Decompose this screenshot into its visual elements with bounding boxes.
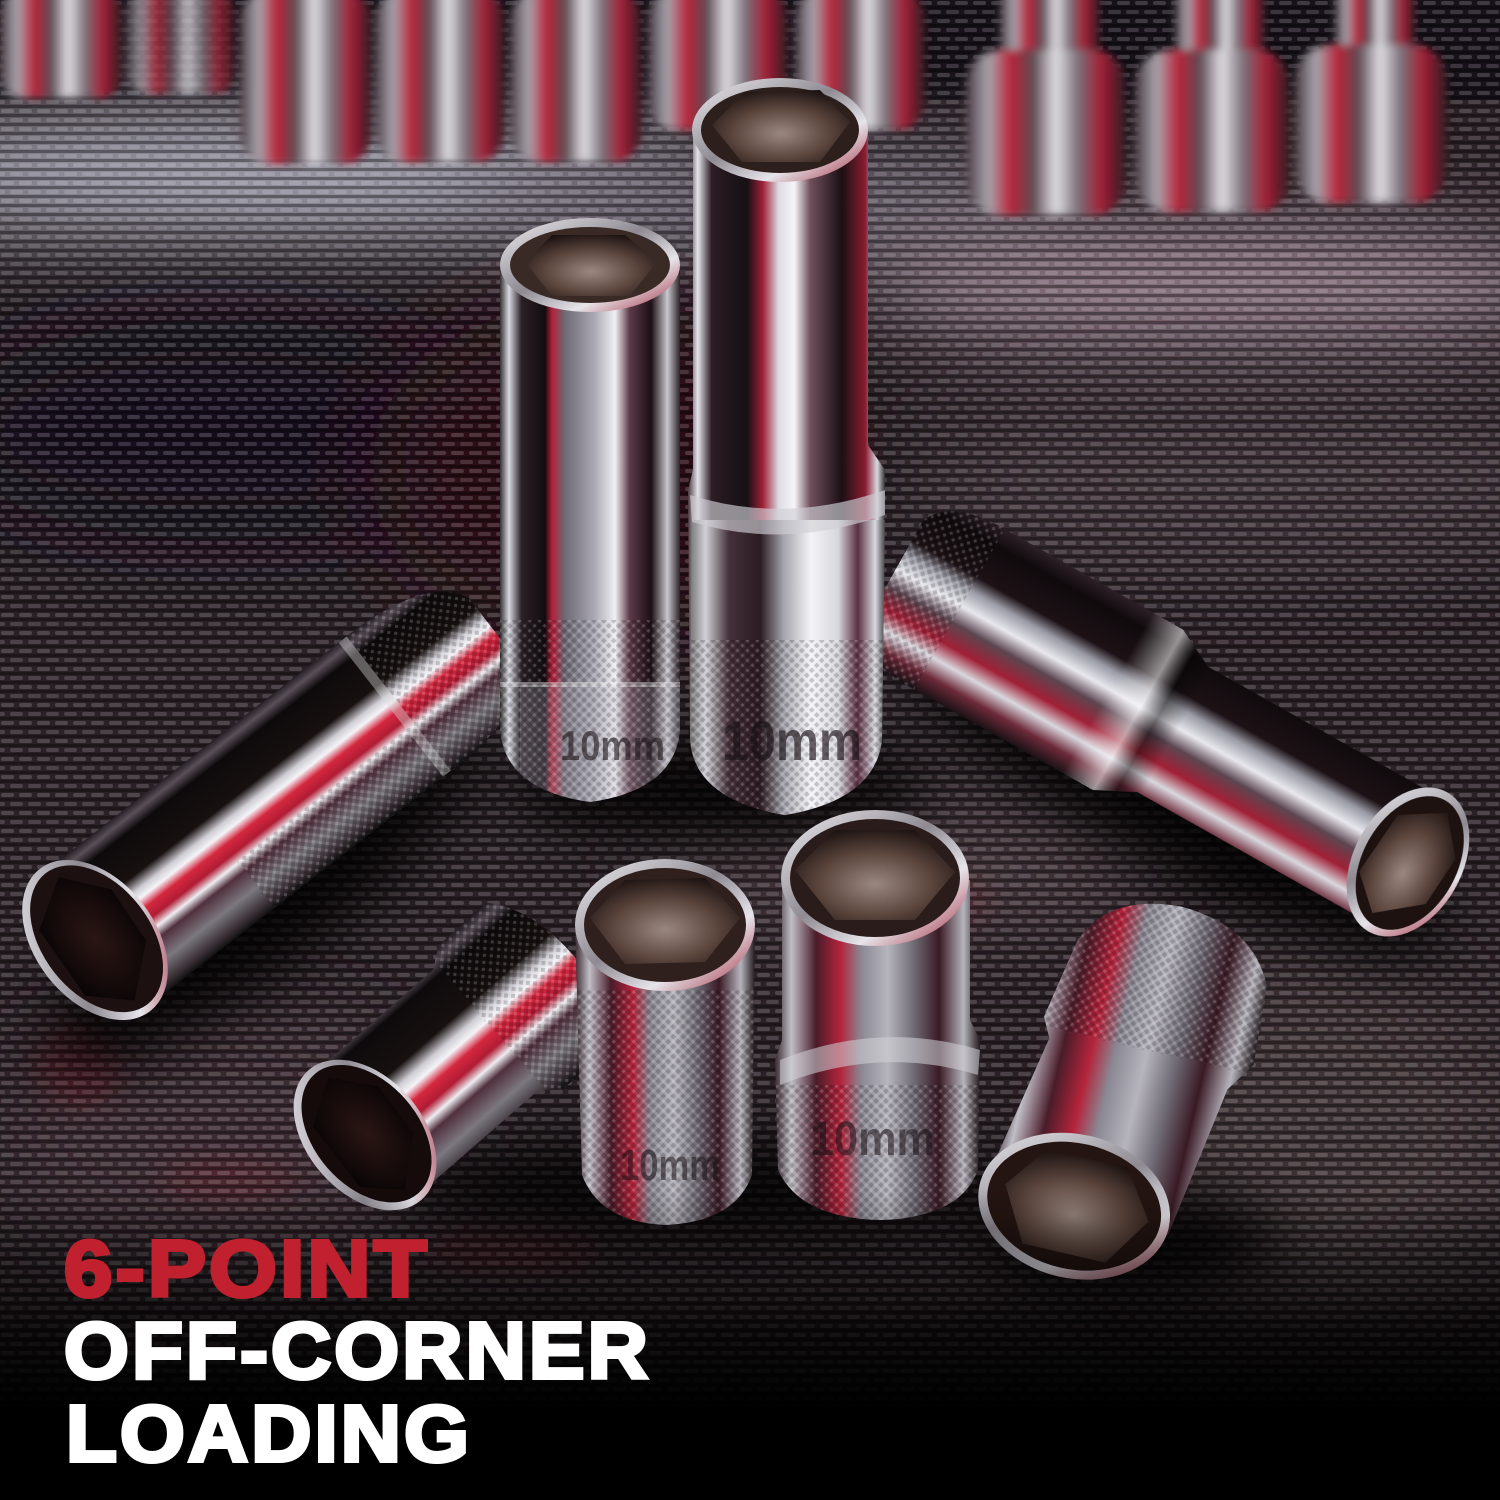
- size marking: 10mm: [810, 1113, 935, 1166]
- bottom fade to black: [0, 1190, 1500, 1500]
- socket: short, standing centre: [575, 859, 755, 1225]
- hex opening: [993, 1141, 1159, 1270]
- hex opening: [795, 830, 955, 920]
- socket: deep, standing left: [500, 218, 680, 805]
- background row of blurred sockets, top left: [0, 0, 925, 164]
- size marking: 10mm: [722, 709, 862, 772]
- heading line: LOADING: LOADING: [66, 1389, 472, 1478]
- socket: deep, standing right: [688, 78, 885, 815]
- background row of blurred sockets, top right: [966, 0, 1447, 215]
- hex opening: [18, 856, 174, 1023]
- hex opening: [590, 878, 740, 964]
- heading line: OFF-CORNER: OFF-CORNER: [64, 1306, 651, 1395]
- hex opening: [292, 1056, 441, 1211]
- socket: short, tipped toward viewer: [978, 904, 1266, 1280]
- socket: short, standing right: [775, 810, 980, 1220]
- size marking: 10mm: [620, 1141, 720, 1190]
- hex opening: [712, 90, 850, 162]
- hex opening: [525, 235, 657, 296]
- socket shadows: [4, 593, 1476, 1295]
- heading line: 6-POINT: 6-POINT: [64, 1224, 430, 1313]
- hex opening: [1344, 789, 1473, 936]
- size marking: 10mm: [560, 722, 665, 769]
- socket: short, lying left: [294, 902, 580, 1210]
- socket: deep, lying right: [883, 511, 1470, 937]
- socket: deep, lying left: [22, 592, 500, 1020]
- caption heading: [64, 1224, 651, 1478]
